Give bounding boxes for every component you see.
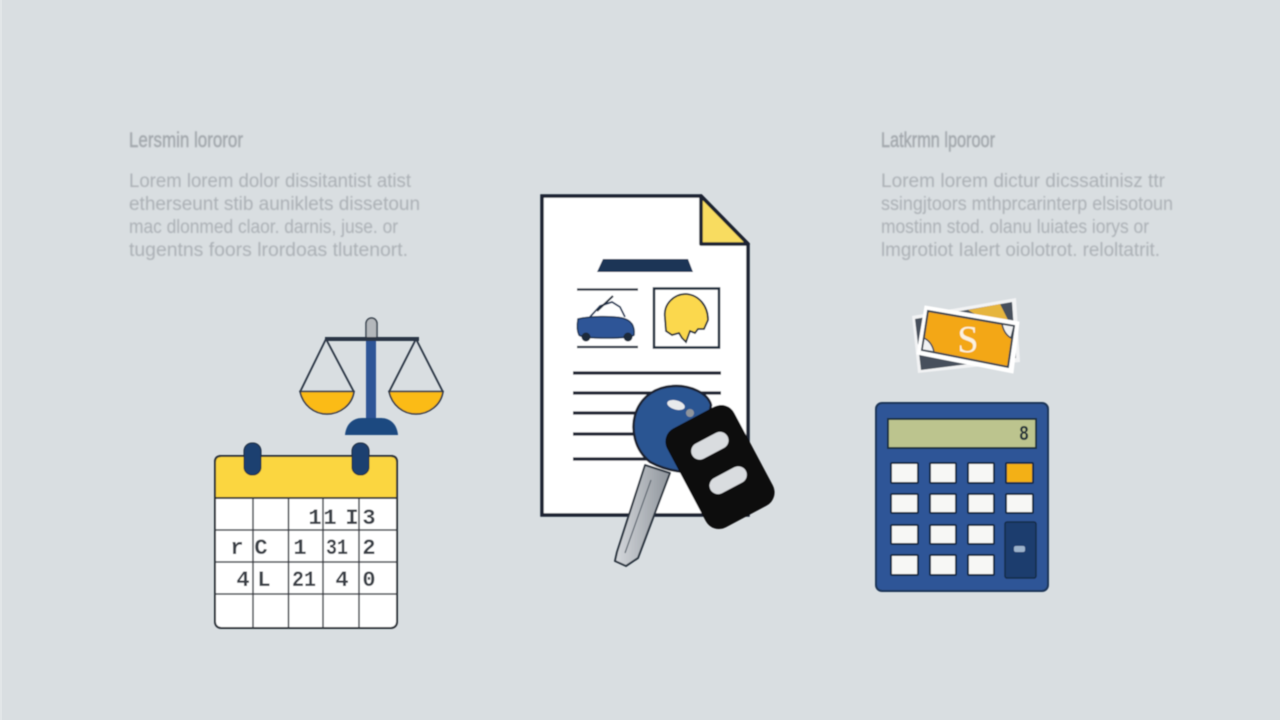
right text block	[881, 129, 1173, 261]
icon: money bills	[912, 298, 1020, 373]
right paragraph: mostinn stod. olanu luiates iorys or	[881, 217, 1150, 238]
icon: document with keys	[542, 196, 780, 566]
icon: balance scales	[300, 318, 443, 435]
right heading: Latkrmn lporoor	[881, 129, 995, 152]
calendar numbers	[230, 506, 376, 593]
right paragraph: ssingjtoors mthprcarinterp elsisotoun	[881, 194, 1173, 215]
calendar numbers: 4	[236, 568, 250, 593]
icon: calculator	[876, 403, 1048, 591]
document title bar	[597, 259, 693, 272]
calendar numbers: r	[230, 536, 244, 561]
calculator display	[888, 419, 1036, 448]
bill corners	[922, 324, 1014, 352]
document page	[542, 196, 748, 515]
scale strings	[300, 339, 443, 392]
calculator body	[876, 403, 1048, 591]
left paragraph: mac dlonmed claor. darnis, juse. or	[129, 217, 399, 238]
left paragraph: tugentns foors lrordoas tlutenort.	[129, 240, 408, 261]
calendar numbers: I	[345, 506, 359, 531]
left pan	[300, 392, 354, 414]
calendar numbers: 2	[362, 536, 376, 561]
right pan	[389, 392, 443, 414]
calendar numbers: 1	[293, 536, 307, 561]
calendar numbers: 4	[335, 568, 349, 593]
tall equals key	[1005, 522, 1036, 578]
scale base	[345, 418, 398, 435]
right paragraph	[881, 171, 1173, 261]
front bill	[917, 306, 1019, 373]
left paragraph: Lorem lorem dolor dissitantist atist	[129, 171, 412, 192]
calendar numbers: 31	[326, 536, 348, 561]
left heading: Lersmin lororor	[129, 129, 243, 152]
back bill	[912, 298, 1020, 373]
calendar ring right	[352, 443, 369, 475]
display digit: 8	[1019, 424, 1029, 447]
right paragraph: lmgrotiot Ialert oiolotrot. reloltatrit.	[881, 240, 1160, 261]
calendar numbers: C	[254, 536, 268, 561]
calendar header	[215, 456, 397, 498]
icon: calendar	[215, 443, 397, 628]
calendar numbers: 1	[308, 506, 322, 531]
calendar grid	[215, 498, 397, 628]
calendar ring left	[244, 443, 261, 475]
calendar numbers: L	[257, 568, 271, 593]
left text block	[129, 129, 420, 261]
right paragraph: Lorem lorem dictur dicssatinisz ttr	[881, 171, 1166, 192]
key fob	[660, 400, 780, 534]
car picture	[577, 290, 638, 347]
calendar numbers: 1	[323, 506, 337, 531]
calendar body	[215, 456, 397, 628]
document text lines	[573, 373, 721, 459]
head picture	[654, 288, 719, 348]
scale post	[366, 339, 376, 421]
folded corner	[701, 196, 748, 244]
left paragraph	[129, 171, 420, 261]
dollar sign: S	[957, 319, 979, 361]
calendar numbers: 0	[362, 568, 376, 593]
scale post top	[366, 318, 377, 342]
calendar numbers: 3	[362, 506, 376, 531]
calculator keys	[891, 463, 1033, 575]
left paragraph: etherseunt stib auniklets dissetoun	[129, 194, 420, 215]
calendar numbers: 21	[292, 568, 316, 593]
equals key mark	[1014, 546, 1025, 552]
car key	[615, 386, 711, 566]
scale beam	[325, 337, 419, 341]
